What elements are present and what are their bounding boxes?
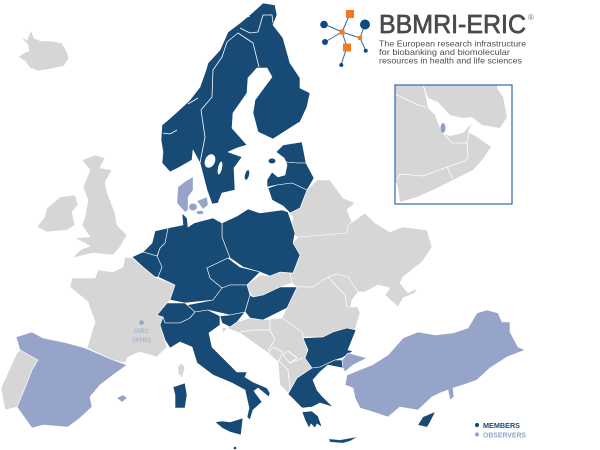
Lolland xyxy=(196,211,204,214)
Estonia xyxy=(276,142,306,163)
Germany xyxy=(157,213,230,303)
IARC WHO marker xyxy=(132,320,151,344)
Italy xyxy=(160,310,270,420)
Hungary xyxy=(245,287,297,320)
WHO label: (WHO) xyxy=(132,338,151,344)
Sardinia xyxy=(173,383,187,408)
legend xyxy=(475,423,526,440)
IARC label: IARC xyxy=(134,329,149,335)
Malta xyxy=(234,447,236,449)
lake Vattern xyxy=(217,161,223,175)
registered mark: ® xyxy=(528,13,534,22)
Belgium and Luxembourg xyxy=(132,252,162,277)
legend: observers: OBSERVERS xyxy=(483,432,526,440)
Switzerland xyxy=(157,303,195,323)
Saaremaa xyxy=(268,158,276,164)
Scandinavian borders xyxy=(200,15,273,163)
inset land xyxy=(395,85,507,202)
Peloponnese xyxy=(302,411,322,428)
logo tagline: resources in health and life sciences xyxy=(379,56,522,66)
non-member countries xyxy=(1,30,432,410)
Iceland xyxy=(18,30,69,71)
Norway, Sweden and Finland xyxy=(161,3,310,204)
Lithuania xyxy=(268,183,307,213)
Bulgaria xyxy=(303,328,356,368)
Belarus xyxy=(289,180,355,237)
lake Vanern xyxy=(203,153,217,169)
legend: members: MEMBERS xyxy=(483,423,520,430)
logo xyxy=(320,9,534,67)
inset borders xyxy=(395,85,469,180)
Denmark Jutland xyxy=(177,177,193,212)
logo tagline: for biobanking and biomolecular xyxy=(379,47,510,57)
Funen xyxy=(189,204,197,210)
Qatar xyxy=(440,123,446,133)
Ireland xyxy=(37,195,78,232)
inset map: Gulf region xyxy=(395,85,512,204)
Arabian Peninsula xyxy=(395,85,491,202)
Sicily xyxy=(215,418,243,435)
logo network icon xyxy=(320,10,370,67)
Cyprus xyxy=(418,412,435,427)
Great Britain xyxy=(72,155,127,258)
Romania xyxy=(282,277,360,337)
Spain xyxy=(16,332,127,428)
Western Balkans xyxy=(222,318,312,393)
Moldova xyxy=(328,274,358,310)
logo tagline xyxy=(379,38,526,66)
Norwegian fjords xyxy=(163,16,250,134)
Crete xyxy=(329,437,357,443)
Iran xyxy=(424,85,507,128)
Poland xyxy=(222,209,300,276)
Balearic Islands xyxy=(117,395,127,402)
Ukraine xyxy=(290,213,432,307)
Corsica xyxy=(178,363,185,378)
observer countries xyxy=(16,177,525,428)
Czech Republic xyxy=(207,258,260,288)
Turkey Anatolia xyxy=(345,310,525,417)
Austria xyxy=(187,285,250,315)
Latvia xyxy=(267,162,314,190)
logo tagline: The European research infrastructure xyxy=(379,38,526,48)
Gotland xyxy=(244,170,250,180)
Slovenia xyxy=(220,312,245,327)
member countries xyxy=(132,3,435,449)
France xyxy=(70,257,175,363)
Zealand xyxy=(197,197,208,209)
Portugal xyxy=(1,350,38,410)
IARC dot xyxy=(139,320,144,325)
Greece xyxy=(288,360,343,408)
Turkey Thrace xyxy=(342,353,367,372)
logo wordmark: BBMRI-ERIC xyxy=(379,9,526,39)
Slovakia xyxy=(247,272,292,297)
inset frame xyxy=(395,85,512,204)
Netherlands xyxy=(143,228,168,256)
Western Balkans borders xyxy=(240,318,303,390)
